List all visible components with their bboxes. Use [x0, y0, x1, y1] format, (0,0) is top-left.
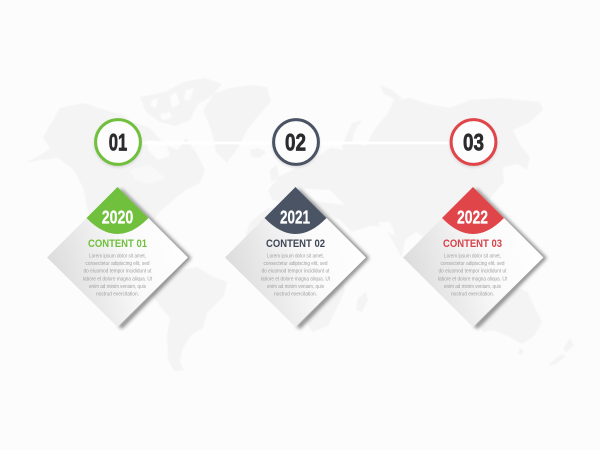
- card 2020: [47, 187, 192, 329]
- body text: Lorem ipsum dolor sit amet,: [444, 254, 501, 260]
- South America: [152, 267, 227, 371]
- body text: consectetur adipiscing elit, sed: [440, 261, 504, 267]
- heading: CONTENT 03: [443, 238, 502, 250]
- number badge 03: 03: [463, 130, 484, 156]
- body text: enim ad minim veniam, quis: [267, 284, 324, 290]
- heading: CONTENT 01: [88, 238, 147, 250]
- Iceland: [250, 148, 266, 158]
- Scandinavia: [342, 120, 362, 160]
- Indonesia: [458, 262, 512, 284]
- card 2022: 2022: [457, 208, 488, 228]
- North America: [25, 103, 205, 288]
- body text: labore et dolore magna aliqua. Ut: [438, 276, 507, 282]
- step 03: [403, 120, 547, 329]
- number badge 02: 02: [285, 130, 306, 156]
- number badge 03: [450, 120, 498, 168]
- number badge 01: 01: [109, 130, 127, 156]
- Madagascar: [356, 292, 368, 312]
- step 01: [47, 120, 192, 329]
- body text: [83, 254, 152, 298]
- year cap: [442, 187, 504, 234]
- body text: [438, 254, 507, 298]
- Arctic islands: [140, 78, 222, 126]
- body text: [261, 254, 330, 298]
- body text: enim ad minim veniam, quis: [444, 284, 501, 290]
- body text: do eiusmod tempor incididunt ut: [84, 268, 152, 274]
- heading: CONTENT 02: [266, 238, 325, 250]
- body text: do eiusmod tempor incididunt ut: [262, 268, 330, 274]
- New Zealand: [550, 338, 574, 366]
- step 02: [225, 120, 370, 329]
- body text: Lorem ipsum dolor sit amet,: [89, 254, 146, 260]
- number badge 02: [272, 120, 320, 168]
- map inlets: [130, 88, 396, 236]
- connector line: [140, 142, 452, 144]
- body text: enim ad minim veniam, quis: [89, 284, 146, 290]
- body text: labore et dolore magna aliqua. Ut: [261, 276, 330, 282]
- Novaya Zemlya: [380, 85, 402, 100]
- year cap: [264, 187, 326, 234]
- body text: nostrud exercitation.: [274, 292, 317, 298]
- Africa: [244, 206, 358, 332]
- year cap: [86, 187, 148, 234]
- body text: nostrud exercitation.: [451, 292, 494, 298]
- Eurasia: [268, 98, 543, 258]
- card 2020: 2020: [102, 208, 133, 228]
- Greenland: [203, 85, 271, 163]
- body text: nostrud exercitation.: [96, 292, 139, 298]
- body text: consectetur adipiscing elit, sed: [264, 261, 328, 267]
- body text: do eiusmod tempor incididunt ut: [438, 268, 507, 274]
- number badge 01: [94, 120, 142, 168]
- UK: [270, 165, 279, 182]
- body text: consectetur adipiscing elit, sed: [86, 261, 150, 267]
- body text: Lorem ipsum dolor sit amet,: [267, 254, 324, 260]
- world map: [25, 78, 574, 371]
- card 2021: [225, 187, 370, 329]
- Australia: [480, 288, 542, 344]
- card 2022: [403, 187, 547, 329]
- body text: labore et dolore magna aliqua. Ut: [83, 276, 152, 282]
- Tasmania: [518, 349, 524, 355]
- card 2021: 2021: [280, 208, 310, 228]
